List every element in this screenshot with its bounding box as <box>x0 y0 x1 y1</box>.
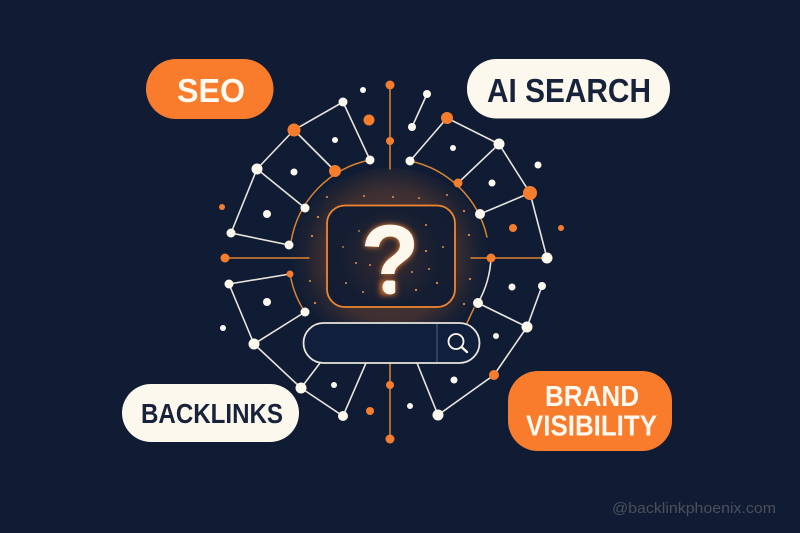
spark particles <box>309 194 471 305</box>
panel frame <box>327 206 455 307</box>
label: Backlinks <box>122 384 299 442</box>
central glow <box>290 168 490 344</box>
label: Brand Visibility: VISIBILITY <box>526 410 657 442</box>
watermark: @backlinkphoenix.com <box>612 500 776 517</box>
white nodes <box>220 87 552 421</box>
orange arcs and spokes <box>225 85 547 439</box>
label: SEO: SEO <box>177 72 245 109</box>
label: AI Search <box>467 59 670 118</box>
label: AI Search: AI SEARCH <box>487 72 651 109</box>
search field <box>304 323 480 363</box>
question mark glow: ? <box>361 205 419 315</box>
infographic canvas <box>122 59 775 516</box>
divider <box>436 324 438 362</box>
label: Brand Visibility <box>508 371 672 451</box>
panel inner glow <box>340 212 440 304</box>
orange nodes <box>219 80 564 444</box>
question mark: ? <box>361 205 419 315</box>
question mark panel <box>309 194 471 315</box>
search bar <box>304 323 480 363</box>
network lines <box>229 94 547 416</box>
label: SEO <box>146 59 274 119</box>
icon: magnifying glass <box>448 334 467 352</box>
label: Brand Visibility: BRAND <box>545 381 639 413</box>
label: Backlinks: BACKLINKS <box>141 398 283 429</box>
